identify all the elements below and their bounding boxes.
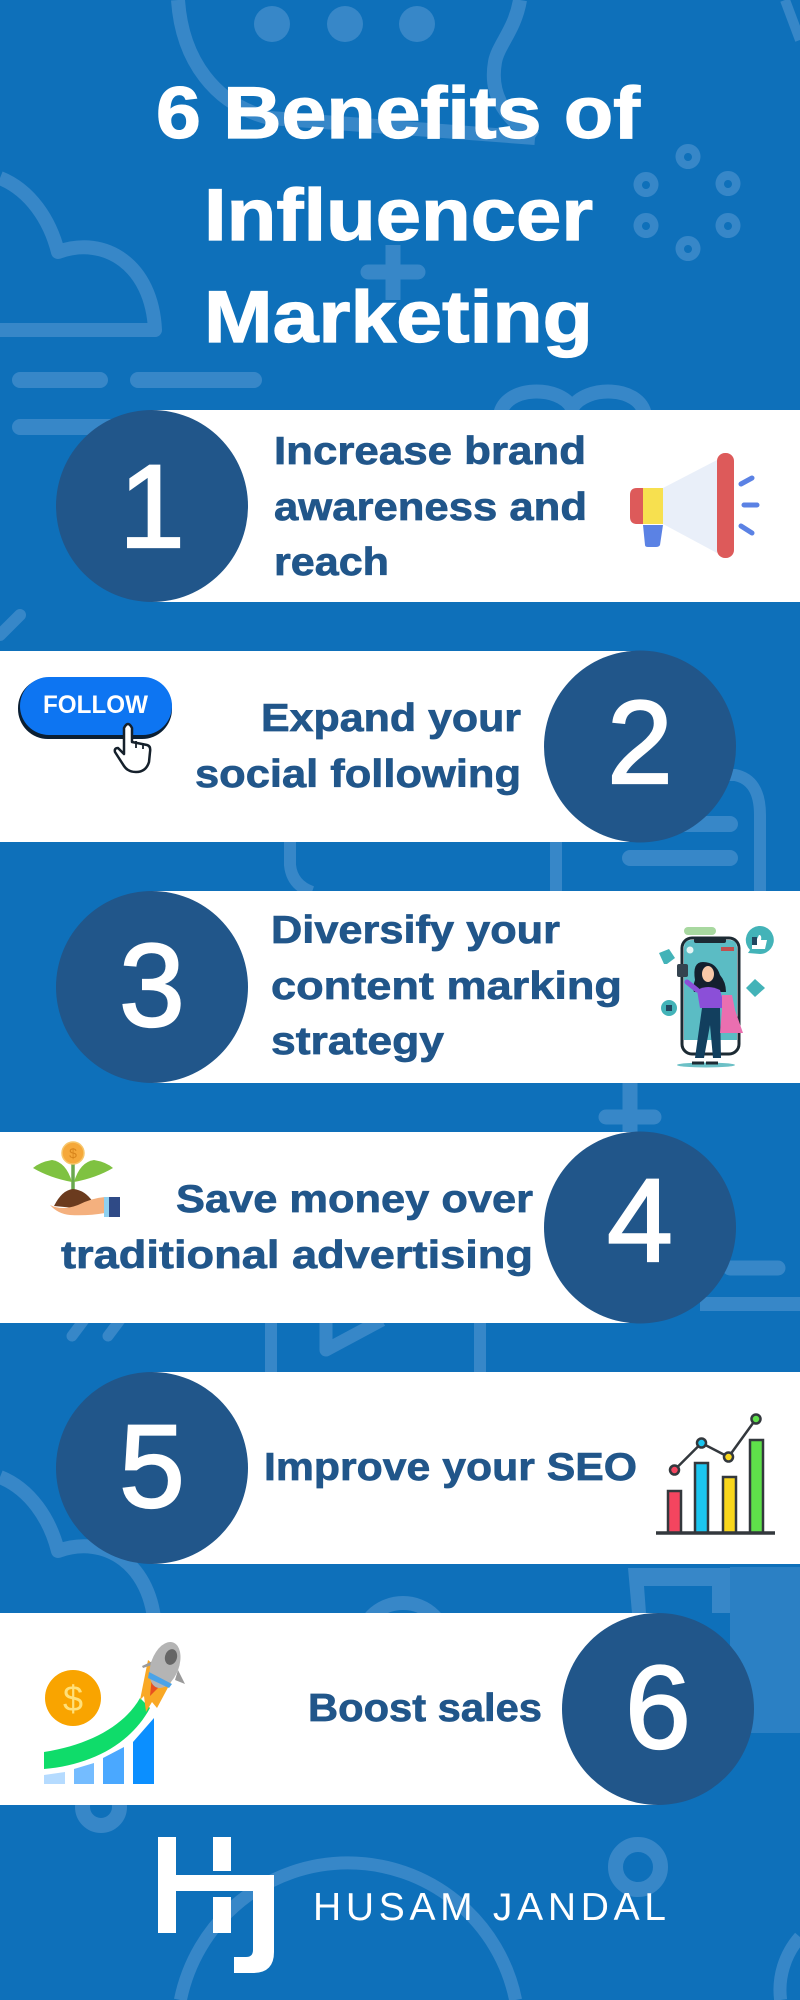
icon: money plant in hand: $ [69,1145,77,1161]
text: save money over traditional advertising: traditional advertising [61,1234,533,1277]
text: increase brand awareness: Increase brand [274,430,586,473]
icon: follow button with hand cursor [18,677,172,772]
text: diversify your content marking strategy: strategy [271,1020,444,1063]
number 3: 3 [119,920,185,1052]
text: increase brand awareness: reach [274,541,389,584]
panel: benefit 3 [56,891,800,1083]
text: boost sales: Boost sales [308,1687,542,1730]
icon: rocket sales growth: $ [63,1678,83,1719]
text: increase brand awareness: awareness and [274,486,587,529]
panel: benefit 4 [0,1132,736,1324]
text: save money over traditional advertising: Save money over [176,1178,533,1221]
text: diversify your content marking strategy: content marking [271,965,622,1008]
text: improve your seo: Improve your SEO [264,1446,637,1489]
brand name: HUSAM JANDAL [313,1886,666,1929]
number 5: 5 [119,1401,185,1533]
panel: benefit 6 [0,1613,754,1805]
panel: benefit 5 [56,1372,800,1564]
text: diversify your content marking strategy: Diversify your [271,909,560,952]
icon: growth bar chart [656,1414,775,1533]
text: diversify your content marking strategy [271,909,622,1063]
title [156,73,641,358]
number 6: 6 [625,1642,691,1774]
text: expand your social following: social following [195,753,521,796]
number 4: 4 [607,1155,673,1287]
text: expand your social following: Expand your [261,697,521,740]
panel: benefit 1 [56,410,800,602]
icon: megaphone [630,453,757,558]
title: 6 Benefits of [156,73,641,154]
text: increase brand awareness [274,430,587,584]
title: Influencer [204,175,593,256]
number 2: 2 [607,677,673,809]
logo: Husam Jandal [158,1837,666,1973]
text: expand your social following [195,697,521,796]
icon: follow button with hand cursor: FOLLOW [43,691,148,719]
panel: benefit 2 [0,650,736,842]
icon: HJ monogram [158,1837,274,1973]
title: Marketing [204,277,593,358]
icon: rocket sales growth [44,1638,186,1784]
icon: influencer with phone [659,926,774,1068]
text: save money over traditional advertising [61,1178,533,1277]
icon: money plant in hand [33,1142,120,1217]
number 1: 1 [119,441,185,573]
